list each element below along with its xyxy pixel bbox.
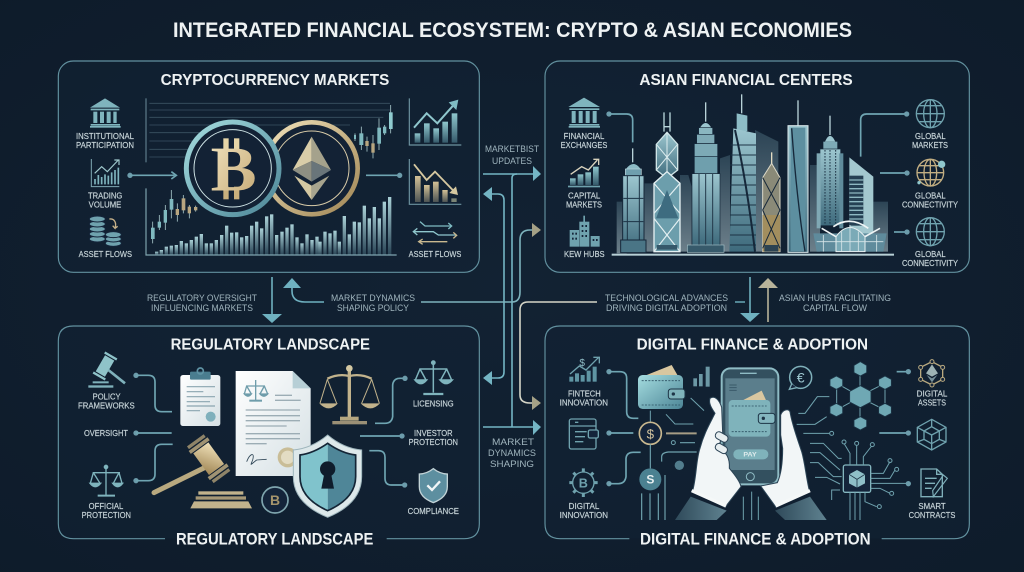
label: asset flows right: ASSET FLOWS [409,249,462,259]
label: digital assets: DIGITAL [917,388,948,398]
label: compliance: COMPLIANCE [408,506,459,516]
icon: bitcoin seal: B [270,492,280,508]
label: regulatory oversight: REGULATORY OVERSIGHT [147,293,257,304]
connector: central network arrows [421,166,597,435]
icon: small bars [693,367,710,387]
label: global connectivity two: GLOBAL [915,249,946,259]
icon: document with seal [236,371,311,476]
label: global connectivity one: GLOBAL [915,191,946,201]
icon: gavel block [190,491,252,508]
icon: trading volume [91,159,119,187]
building 1 [621,148,646,253]
icon: euro bubble: € [797,369,805,385]
label: market dynamics shaping: SHAPING [490,459,534,470]
arrow: technology downward [735,277,760,322]
label: policy frameworks: POLICY [93,391,121,401]
label: asian hubs facilitating: ASIAN HUBS FACILITATING [779,293,891,304]
label: smart contracts: CONTRACTS [909,510,956,520]
label: global connectivity one [902,191,958,210]
arrow: left into coins [127,172,176,179]
label: fintech innovation: FINTECH [568,388,601,398]
icon: large scales [319,365,380,424]
label: capital markets: CAPITAL [568,191,601,201]
icon: small node [662,441,697,520]
connector: towers to global markets [861,111,909,157]
panel: cryptocurrency markets [58,61,479,272]
label: key hubs: KEW HUBS [564,249,605,259]
title: INTEGRATED FINANCIAL ECOSYSTEM: CRYPTO & ASIAN ECONOMIES [173,19,852,42]
icon: bitcoin seal [262,487,288,513]
connector: investor protection [360,433,405,439]
chart: decline mini [409,159,461,204]
icon: bitcoin coin: B [211,134,257,204]
icon: ethereum hexagon [919,360,945,387]
label: institutional participation: INSTITUTIONAL [76,131,134,141]
icon: dollar coin [639,422,697,444]
label: technological advances [605,293,728,314]
label: financial exchanges: FINANCIAL [564,131,605,141]
heading: digital finance top: DIGITAL FINANCE & ADOPTION [637,336,868,353]
icon: clipboard [180,368,220,426]
icon: fintech innovation [569,357,599,382]
icon: digital innovation: B [579,476,588,490]
building 4 slanted tower [729,94,756,252]
label: marketbist updates [485,144,539,167]
label: official protection: OFFICIAL [89,501,124,511]
icon: small scales [90,465,123,496]
label: institutional participation: PARTICIPATION [76,140,134,150]
label: trading volume: VOLUME [89,200,122,210]
label: asian hubs facilitating [779,293,891,314]
chart: candlesticks upper right [354,105,393,158]
connector: towers to connectivity [880,170,910,176]
label: trading volume: TRADING [88,190,122,200]
label: smart contracts: SMART [918,501,946,511]
label: regulatory oversight: INFLUENCING MARKETS [151,303,253,314]
panel: asian financial centers [545,61,969,272]
label: official protection: PROTECTION [82,510,131,520]
connector: digital assets [897,369,911,374]
panel: digital finance and adoption [545,326,969,549]
label: market dynamics shaping policy: SHAPING POLICY [337,303,410,314]
arrow: oversight downward [262,277,282,323]
heading: regulatory landscape bottom: REGULATORY LANDSCAPE [176,530,373,549]
icon: network cube [917,419,946,450]
label: fintech innovation [560,388,608,407]
connector: scales to licensing [375,376,408,423]
building 5 gold tower [763,152,780,252]
icon: licensing scales [415,361,452,394]
label: technological advances: DRIVING DIGITAL ADOPTION [606,303,727,314]
label: smart contracts [909,501,956,520]
heading: cryptocurrency markets: CRYPTOCURRENCY MARKETS [161,72,390,89]
icon: bitcoin coin [186,122,279,215]
icon: small gavel [88,352,125,388]
label: market dynamics shaping [488,437,536,470]
label: market dynamics shaping policy: MARKET DYNAMICS [331,293,415,304]
label: financial exchanges [561,131,608,150]
icon: asset flow arrows [413,222,457,244]
label: regulatory oversight [147,293,257,314]
label: official protection [82,501,131,520]
icon: keyhole shield [293,435,362,517]
label: trading volume [88,190,122,210]
icon: hands and sleeves [675,397,827,520]
icon: key hubs [570,216,600,247]
heading: asian financial centers: ASIAN FINANCIAL CENTERS [639,72,853,89]
icon: compliance shield [419,469,447,503]
icon: big gavel [154,433,231,493]
label: oversight: OVERSIGHT [84,428,128,438]
arrow: market dynamics upward [283,278,324,302]
connector: policy [133,373,172,412]
label: global markets: GLOBAL [915,131,946,141]
label: marketbist updates: MARKETBIST [485,144,539,155]
icon: dollar coin: $ [647,426,655,441]
label: asian hubs facilitating: CAPITAL FLOW [803,303,867,314]
building 7 spire tower [817,116,843,228]
label: global connectivity two: CONNECTIVITY [902,258,958,268]
connector: fintech [606,369,638,418]
panel: regulatory landscape [58,326,479,549]
icon: globe markets [916,100,944,128]
label: fintech innovation: INNOVATION [560,397,608,407]
icon: coin stacks [89,216,121,246]
chart: price grid [146,98,390,162]
label: digital innovation [560,501,608,520]
connector: hall to connectivity [894,229,910,235]
label: investor protection: PROTECTION [409,437,458,447]
label: institutional participation [76,131,134,150]
heading: regulatory landscape top: REGULATORY LANDSCAPE [171,336,370,353]
building 8 wedge [849,157,873,252]
label: investor protection: INVESTOR [414,428,453,438]
connector: compliance [369,451,407,488]
label: policy frameworks [78,391,135,410]
arrow: coins to right [366,173,402,178]
heading: digital finance bottom: DIGITAL FINANCE & ADOPTION [640,530,871,549]
label: global markets [912,131,948,150]
connector: smart contracts [906,481,911,486]
connector: exchanges to skyline [606,111,633,142]
label: market dynamics shaping: MARKET [492,437,534,448]
icon: chip [832,440,907,520]
connector: network cube [879,430,911,436]
chart: candlesticks lower left [151,190,197,243]
icon: app wallet [569,419,598,449]
chart: growth mini [409,98,461,145]
icon: phone with wallet [722,368,778,484]
label: digital innovation: INNOVATION [560,510,608,520]
connector: circuits from phone [803,431,842,484]
icon: digital innovation [569,468,598,497]
skyline background [617,130,888,253]
connector: app to dollar [606,430,633,436]
icon: financial exchange [568,98,600,128]
label: digital assets: ASSETS [918,397,946,407]
building 2 glass tower [654,112,680,252]
building 9 civic hall [813,221,887,252]
icon: fintech innovation: $ [579,358,585,369]
connector: official [133,444,173,483]
label: capital markets [566,191,602,210]
label: capital markets: MARKETS [566,200,602,210]
icon: ethereum coin [266,122,358,214]
label: global connectivity two [902,249,958,268]
arrow: capital flow upward [758,278,778,322]
label: digital innovation: DIGITAL [569,501,600,511]
connector: digital innovation [606,452,641,486]
icon: phone with wallet: PAY [743,451,757,458]
label: marketbist updates: UPDATES [492,156,532,167]
label: investor protection [409,428,458,447]
label: financial exchanges: EXCHANGES [561,140,608,150]
icon: globe connectivity [916,218,944,246]
label: licensing: LICENSING [413,399,454,409]
icon: capital markets [568,159,600,187]
ground line [612,254,894,256]
label: digital assets [917,388,948,407]
label: asset flows left: ASSET FLOWS [79,249,132,259]
building 3 stepped tower [687,102,724,252]
connector lines: wallet to phone [650,398,704,424]
label: global markets: MARKETS [912,140,948,150]
icon: blockchain network [797,362,891,430]
icon: lower coin [639,444,661,520]
building 6 tall tower [788,100,808,252]
label: policy frameworks: FRAMEWORKS [78,400,135,410]
chart: volume bars [155,197,391,255]
icon: globe connectivity gold [917,159,945,186]
label: global connectivity one: CONNECTIVITY [902,200,958,210]
connector: oversight [133,430,172,436]
icon: lower coin: S [646,473,654,487]
icon: euro bubble [789,366,812,389]
label: market dynamics shaping policy [331,293,415,314]
icon: institution [90,98,121,128]
icon: smart contract [921,469,947,497]
icon: wallet [638,365,685,409]
label: market dynamics shaping: DYNAMICS [488,448,536,459]
label: technological advances: TECHNOLOGICAL ADVANCES [605,293,728,304]
